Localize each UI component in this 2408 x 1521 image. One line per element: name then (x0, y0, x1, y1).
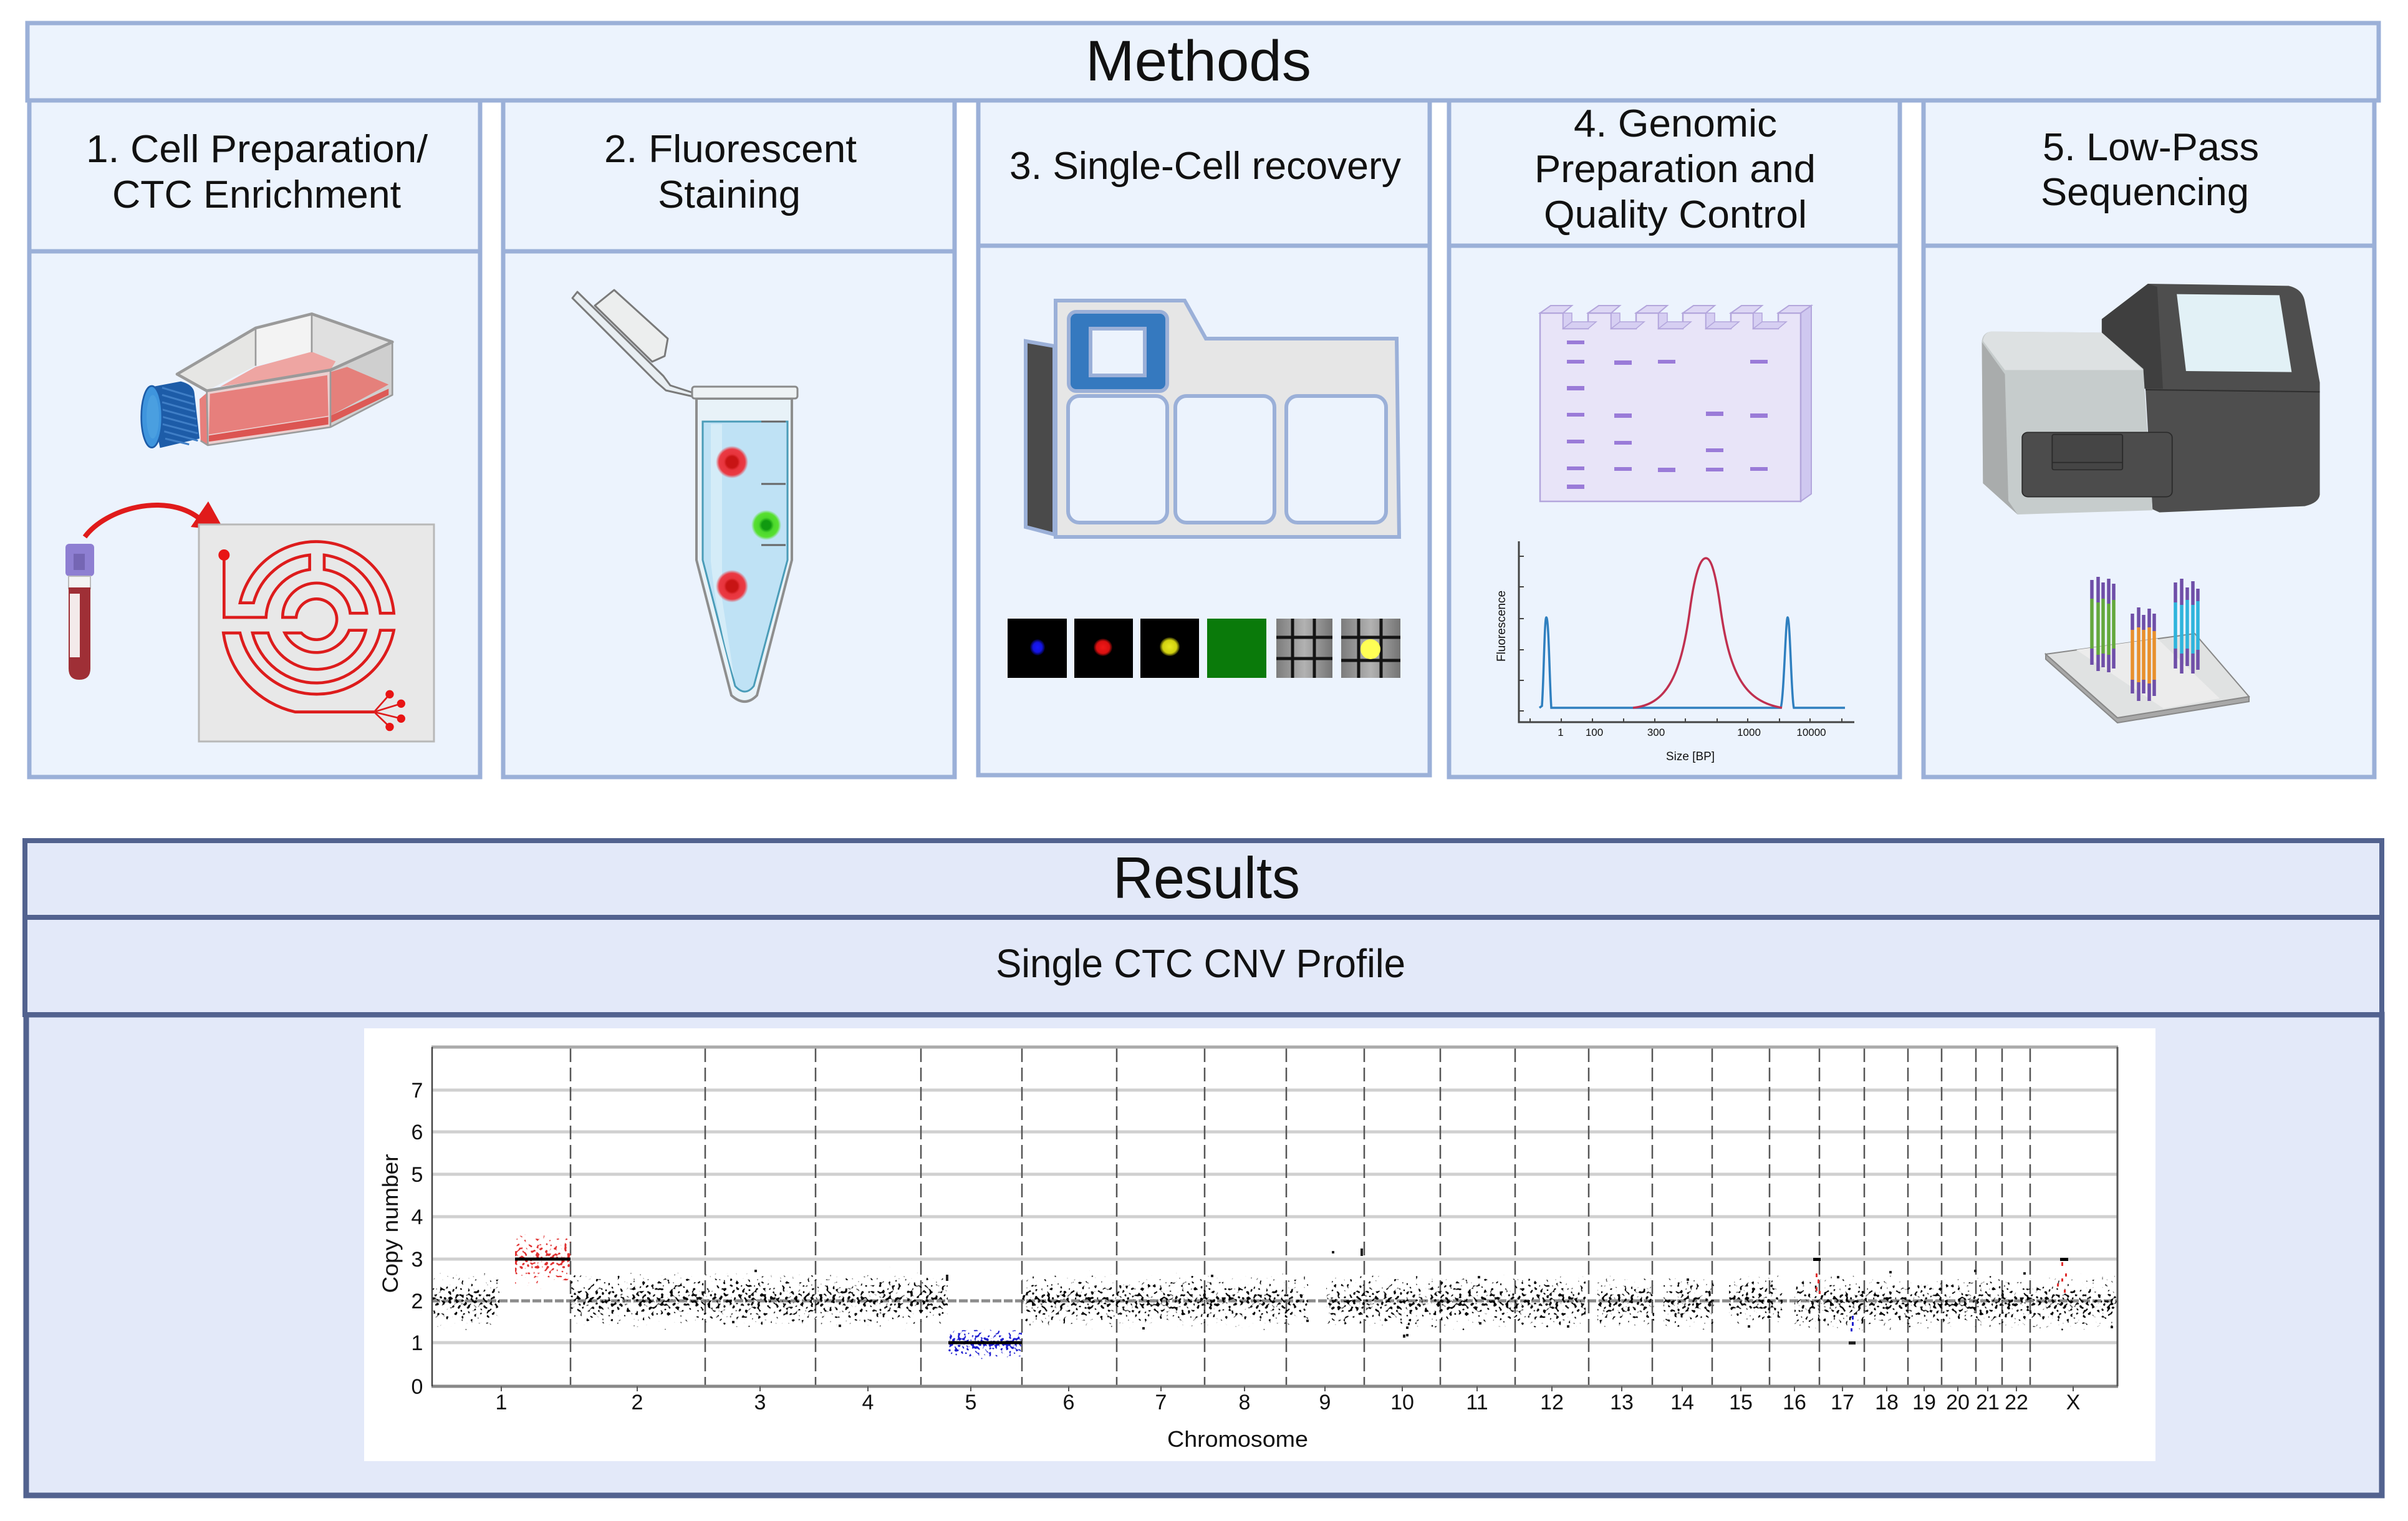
y axis labels: 4 (412, 1205, 423, 1229)
heading: step 2 (604, 128, 857, 216)
methods section (27, 23, 2379, 777)
icon: flow cell clusters (2046, 577, 2249, 723)
heading: step 3: 3. Single-Cell recovery (1009, 145, 1401, 188)
results subheader: Single CTC CNV Profile (996, 941, 1405, 986)
methods header bar (27, 23, 2379, 100)
results subheader (25, 917, 2382, 1015)
methods header bar: Methods (1086, 29, 1311, 93)
y axis labels: 7 (412, 1079, 423, 1103)
icon: culture flask (142, 314, 392, 448)
plot frame (431, 1047, 2118, 1391)
results section (25, 841, 2382, 1495)
y axis labels: 6 (412, 1121, 423, 1144)
x axis labels: 14 (1670, 1391, 1694, 1414)
y axis title: Copy number (378, 1154, 403, 1293)
normal copy-number scatter (433, 1265, 2117, 1338)
panel: step 3 single-cell recovery (978, 100, 1430, 775)
results header bar: Results (1113, 845, 1300, 910)
chromosome dividers (571, 1048, 2030, 1386)
x axis labels: 16 (1783, 1391, 1806, 1414)
panel: step 4 genomic preparation (1449, 100, 1900, 777)
heading: step 2: 2. Fluorescent (604, 128, 857, 171)
x axis labels: 6 (1063, 1391, 1074, 1414)
x axis labels: 12 (1540, 1391, 1564, 1414)
chart: electropherogram: 1 (1558, 727, 1564, 738)
icon: blood tube (65, 544, 94, 680)
heading: step 4: Preparation and (1534, 148, 1816, 191)
y axis labels: 1 (412, 1331, 423, 1355)
x axis labels: 15 (1729, 1391, 1753, 1414)
chart: copy number profile (364, 1028, 2155, 1461)
x axis labels: 20 (1946, 1391, 1970, 1414)
chart: electropherogram: 1000 (1737, 727, 1761, 738)
x axis labels: 11 (1466, 1391, 1488, 1414)
icon: stained cells (716, 446, 781, 602)
x axis labels (496, 1391, 2080, 1414)
icon: recovery cartridge (1026, 301, 1399, 537)
chart: electropherogram (1495, 541, 1854, 763)
heading: step 4: 4. Genomic (1574, 102, 1777, 145)
x axis labels: 8 (1239, 1391, 1250, 1414)
cell micrograph strip (1008, 619, 1400, 678)
heading: step 4 (1534, 102, 1816, 236)
x axis labels: 3 (754, 1391, 766, 1414)
y axis labels: 5 (412, 1163, 423, 1187)
chart: electropherogram: 10000 (1796, 727, 1826, 738)
x axis labels: 21 (1976, 1391, 2000, 1414)
x axis labels: 4 (862, 1391, 874, 1414)
heading: step 5: Sequencing (2041, 171, 2249, 214)
loss segment chromosome 5 (948, 1326, 1022, 1361)
y axis labels (412, 1079, 423, 1399)
chart: electropherogram: 300 (1647, 727, 1665, 738)
results lower panel (26, 1015, 2382, 1495)
icon: microcentrifuge tube (572, 290, 797, 702)
x axis labels: 7 (1155, 1391, 1167, 1414)
heading: step 1: CTC Enrichment (112, 173, 401, 216)
heading: step 4: Quality Control (1544, 193, 1807, 236)
x axis labels: 5 (965, 1391, 976, 1414)
heading: step 2: Staining (658, 173, 801, 216)
chart: electropherogram: Size [BP] (1666, 750, 1715, 763)
panel: step 1 cell preparation (29, 100, 480, 777)
y axis labels: 3 (412, 1248, 423, 1272)
heading: step 1: 1. Cell Preparation/ (86, 128, 428, 171)
x axis labels: 10 (1390, 1391, 1414, 1414)
x axis title: Chromosome (1167, 1426, 1308, 1452)
chart: electropherogram: Fluorescence (1495, 591, 1508, 662)
heading: step 1 (86, 128, 428, 216)
x axis labels: 22 (2005, 1391, 2028, 1414)
icon: sequencer (1982, 284, 2320, 514)
x axis labels: 17 (1831, 1391, 1854, 1414)
icon: electrophoresis gel (1540, 306, 1811, 501)
y axis labels: 2 (412, 1290, 423, 1313)
chart: electropherogram: 100 (1586, 727, 1603, 738)
x axis labels: 1 (496, 1391, 507, 1414)
x axis labels: 19 (1912, 1391, 1936, 1414)
panel: step 5 low-pass sequencing (1924, 100, 2374, 777)
small segments (732, 1248, 2113, 1345)
heading: step 5 (2041, 126, 2259, 214)
x axis labels: 18 (1875, 1391, 1899, 1414)
gridlines (431, 1090, 2117, 1343)
y axis labels: 0 (412, 1375, 423, 1399)
heading: step 5: 5. Low-Pass (2043, 126, 2259, 169)
arrow: tube to chip (85, 501, 224, 537)
x axis labels: 2 (632, 1391, 643, 1414)
x axis labels: X (2066, 1391, 2080, 1414)
panel: step 2 fluorescent staining (503, 100, 955, 777)
icon: microfluidic chip (199, 524, 434, 741)
gain segment chromosome 1 (515, 1226, 571, 1292)
results header bar (25, 841, 2382, 917)
x axis labels: 13 (1610, 1391, 1634, 1414)
x axis labels: 9 (1319, 1391, 1331, 1414)
